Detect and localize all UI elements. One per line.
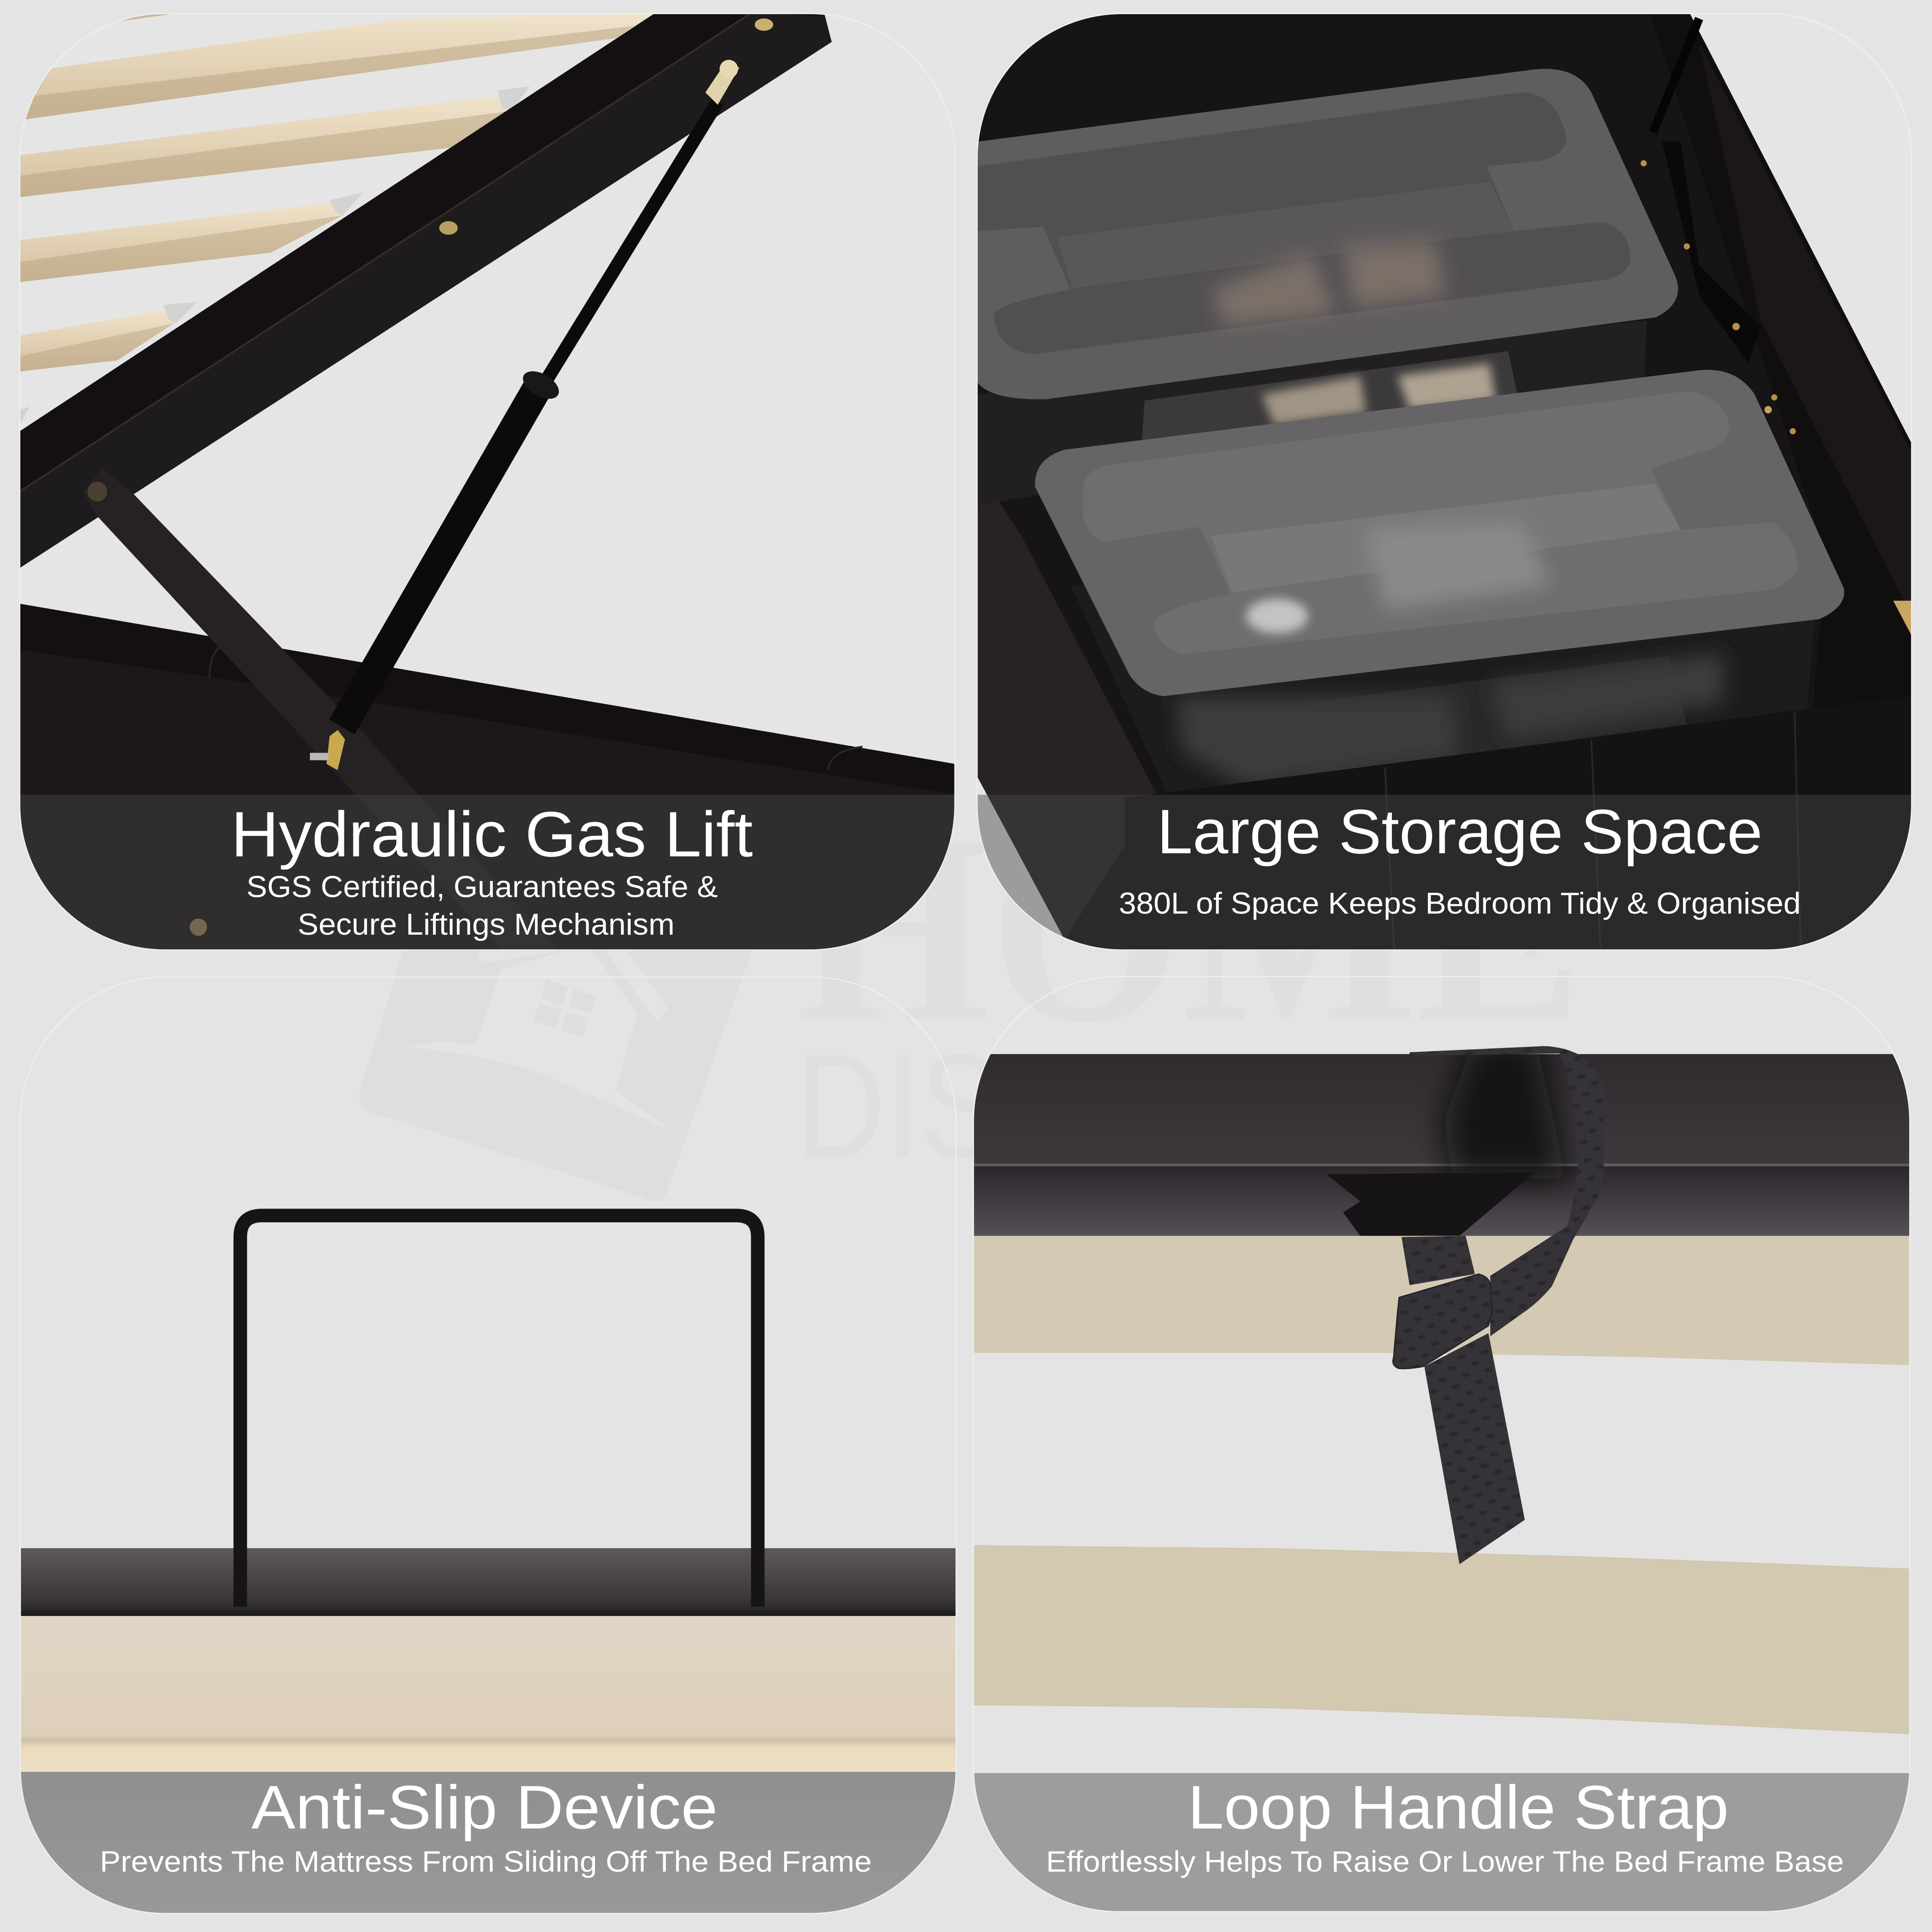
lower wooden slat	[973, 1545, 1910, 1734]
storage bin back lid	[977, 69, 1678, 399]
heading: large storage space: Large Storage Space	[1157, 797, 1762, 867]
heading: loop handle strap: Loop Handle Strap	[1188, 1773, 1728, 1842]
caption band	[973, 1773, 1910, 1912]
caption: Prevents The Mattress From Sliding Off The Bed Frame	[100, 1845, 872, 1878]
bolts	[88, 18, 773, 936]
light left bottom	[977, 776, 1065, 950]
heading: hydraulic gas lift: Hydraulic Gas Lift	[231, 799, 753, 870]
dark frame bar	[20, 1548, 956, 1616]
caption line one: SGS Certified, Guarantees Safe &	[246, 869, 718, 903]
left rail	[977, 468, 1157, 939]
heading: anti-slip device: Anti-Slip Device	[251, 1773, 718, 1842]
front rail	[1125, 696, 1912, 950]
caption: Effortlessly Helps To Raise Or Lower The Bed Frame Base	[1046, 1845, 1844, 1878]
caption: 380L of Space Keeps Bedroom Tidy & Organised	[1119, 886, 1801, 920]
panel: hydraulic gas lift	[20, 14, 955, 950]
dark frame bar	[973, 1040, 1910, 1236]
watermark: home discount logo	[359, 781, 1582, 1202]
panel: anti-slip device	[20, 977, 956, 1914]
panel: large storage space	[977, 14, 1912, 950]
side rail right	[1650, 14, 1912, 708]
watermark: home discount logo: HOME	[796, 781, 1582, 1078]
light background top right	[1690, 14, 1912, 444]
watermark: home discount logo: DISCOUNT	[796, 1024, 1440, 1189]
loop strap	[1393, 1046, 1604, 1564]
lower bed base	[20, 604, 955, 950]
storage bin back	[977, 320, 1647, 505]
upper wooden slat	[973, 1236, 1910, 1365]
lid frame	[20, 14, 832, 568]
caption band	[20, 1772, 956, 1914]
panel outline	[20, 14, 955, 950]
lift arm	[98, 494, 418, 795]
panel: loop handle strap	[973, 976, 1910, 1912]
hardware: strut and brackets	[1640, 18, 1912, 636]
caption band	[20, 795, 955, 950]
caption line two: Secure Liftings Mechanism	[298, 907, 674, 941]
wooden slat	[20, 1615, 956, 1772]
storage bin front lid	[1035, 370, 1844, 696]
caption band	[977, 795, 1912, 950]
anti-slip wire bracket	[240, 1215, 758, 1607]
storage bin front body	[1071, 585, 1816, 798]
gas strut	[310, 60, 739, 770]
wooden slats	[20, 14, 654, 425]
panel outline	[20, 977, 956, 1914]
panel outline	[977, 14, 1912, 950]
panel outline	[973, 976, 1910, 1912]
